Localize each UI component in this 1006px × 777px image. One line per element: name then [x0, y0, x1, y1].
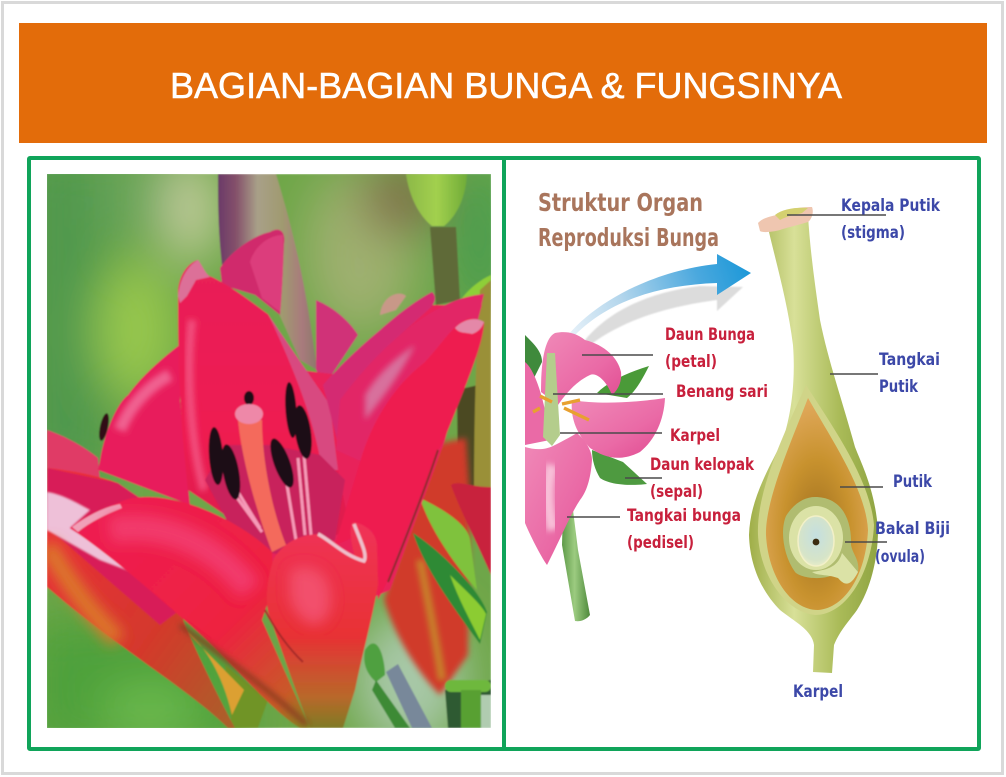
bud stem	[430, 227, 460, 305]
panel: reproductive structure diagram	[525, 188, 950, 702]
labels: pistil parts: Kepala Putik	[841, 196, 941, 216]
small tip	[380, 294, 406, 315]
stigma	[758, 207, 813, 232]
labels: pistil parts: (stigma)	[841, 223, 905, 243]
title: BAGIAN-BAGIAN BUNGA & FUNGSINYA	[170, 65, 842, 106]
diagram heading	[538, 188, 719, 252]
labels: flower parts: Daun kelopak	[650, 455, 755, 475]
red underlay behind petals	[271, 304, 482, 597]
diagram heading: Struktur Organ	[538, 188, 703, 217]
leader lines	[553, 215, 887, 542]
lower right flower	[384, 438, 470, 695]
labels: pistil parts	[793, 196, 950, 702]
pistil	[238, 420, 286, 552]
front heart petal	[267, 522, 378, 728]
right back petal	[316, 300, 358, 385]
ovary cavity	[766, 398, 868, 610]
central petal	[178, 260, 350, 556]
icon: whole flower	[525, 332, 665, 621]
left petal	[98, 346, 190, 505]
inner throat	[205, 445, 345, 555]
labels: pistil parts: Tangkai	[879, 350, 940, 370]
green leaves	[420, 498, 477, 590]
labels: flower parts: Tangkai bunga	[627, 506, 741, 526]
filaments	[230, 455, 311, 540]
labels: flower parts: (sepal)	[650, 482, 703, 502]
panel: flower photo	[47, 174, 491, 728]
labels: pistil parts: (ovula)	[875, 547, 925, 567]
title banner	[19, 23, 987, 143]
green bud	[406, 174, 467, 226]
labels: flower parts	[627, 325, 768, 553]
right stem	[456, 385, 476, 486]
right crimson bud	[451, 483, 491, 575]
embryo sac	[798, 516, 834, 566]
ovule integument	[783, 497, 858, 579]
anthers	[207, 382, 315, 501]
labels: flower parts: (pedisel)	[627, 533, 694, 553]
labels: pistil parts: Karpel	[793, 682, 843, 702]
diagram heading: Reproduksi Bunga	[538, 223, 719, 252]
pistil outer	[749, 215, 878, 673]
green frame	[29, 158, 979, 749]
back pink petal	[220, 230, 284, 315]
bottom right stems	[364, 643, 385, 682]
stray anther behind left petal	[98, 412, 110, 442]
labels: flower parts: Benang sari	[676, 382, 768, 402]
front left petal	[70, 497, 310, 728]
ovary wall	[758, 385, 874, 615]
labels: flower parts: Daun Bunga	[665, 325, 755, 345]
back bud	[218, 174, 317, 370]
labels: pistil parts: Bakal Biji	[875, 519, 950, 539]
labels: pistil parts: Putik	[879, 377, 919, 397]
icon: pistil cross-section	[749, 207, 878, 673]
far left lower petal	[47, 468, 235, 728]
bud base	[225, 665, 268, 728]
far left small petal	[47, 430, 100, 480]
right petals	[323, 292, 435, 440]
labels: flower parts: Karpel	[670, 426, 720, 446]
labels: pistil parts: Putik	[893, 472, 933, 492]
icon: blue arrow	[557, 254, 751, 352]
labels: flower parts: (petal)	[665, 352, 717, 372]
arrow shadow	[585, 286, 743, 345]
